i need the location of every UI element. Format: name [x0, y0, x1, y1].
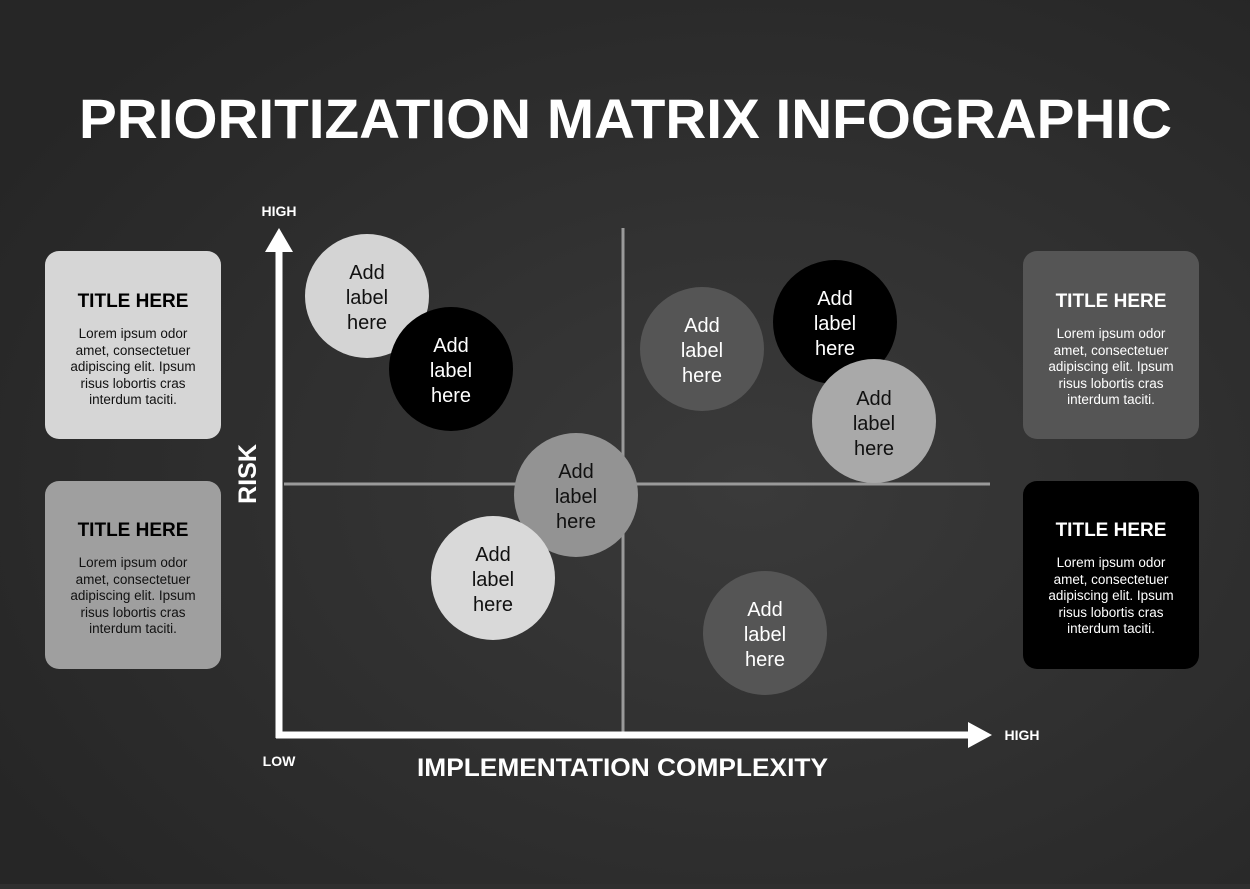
panel: left top: amet, consectetuer	[76, 343, 191, 358]
circle 7	[431, 516, 555, 640]
title: PRIORITIZATION MATRIX INFOGRAPHIC	[79, 87, 1172, 150]
circle 3: here	[682, 365, 722, 387]
circle 4: label	[814, 313, 856, 335]
panel: left bottom: adipiscing elit. Ipsum	[70, 588, 196, 603]
panel: right top: Lorem ipsum odor	[1057, 326, 1166, 341]
panel: left bottom: amet, consectetuer	[76, 572, 191, 587]
circle 7: Add	[475, 544, 511, 566]
circle 8: Add	[747, 599, 783, 621]
circle 7: label	[472, 569, 514, 591]
circle 2	[389, 307, 513, 431]
panel: right top: risus lobortis cras	[1058, 376, 1164, 391]
panel: right top	[1023, 251, 1199, 439]
circle 4: Add	[817, 288, 853, 310]
axis labels: HIGH	[262, 203, 296, 219]
circle 1: here	[347, 312, 387, 334]
panel: left bottom: interdum taciti.	[89, 621, 177, 636]
circle 8: here	[745, 649, 785, 671]
circle 5: Add	[856, 388, 892, 410]
panel: left top: risus lobortis cras	[80, 376, 186, 391]
circle 4	[773, 260, 897, 384]
panel: left bottom: risus lobortis cras	[80, 605, 186, 620]
axis labels: HIGH	[1004, 727, 1040, 743]
panel: right bottom	[1023, 481, 1199, 669]
axis: vertical risk	[265, 228, 293, 738]
circle 2: Add	[433, 335, 469, 357]
circle 1: label	[346, 287, 388, 309]
axis labels: RISK	[234, 444, 262, 504]
panel: left top: Lorem ipsum odor	[79, 326, 188, 341]
circle 2: here	[431, 385, 471, 407]
panel: right bottom: TITLE HERE	[1056, 520, 1166, 541]
panel: left top	[45, 251, 221, 439]
circle 5	[812, 359, 936, 483]
panel: right bottom: risus lobortis cras	[1058, 605, 1164, 620]
panel: left bottom: TITLE HERE	[78, 520, 188, 541]
panel: right bottom: interdum taciti.	[1067, 621, 1155, 636]
panel: left top: TITLE HERE	[78, 291, 188, 312]
panel: right top: interdum taciti.	[1067, 392, 1155, 407]
circle 2: label	[430, 360, 472, 382]
panel: left top: adipiscing elit. Ipsum	[70, 359, 196, 374]
circle 5: here	[854, 438, 894, 460]
circle 4: here	[815, 338, 855, 360]
circle 3: label	[681, 340, 723, 362]
axis labels	[234, 203, 1040, 782]
circle 8: label	[744, 624, 786, 646]
panel: right bottom: Lorem ipsum odor	[1057, 555, 1166, 570]
panel: left bottom	[45, 481, 221, 669]
panel: right top: amet, consectetuer	[1054, 343, 1169, 358]
panel: right top: adipiscing elit. Ipsum	[1048, 359, 1174, 374]
panel: right bottom: adipiscing elit. Ipsum	[1048, 588, 1174, 603]
circle 5: label	[853, 413, 895, 435]
circle 6: label	[555, 486, 597, 508]
axis labels: IMPLEMENTATION COMPLEXITY	[417, 754, 828, 782]
circle 1: Add	[349, 262, 385, 284]
panel: right bottom: amet, consectetuer	[1054, 572, 1169, 587]
axis labels: LOW	[263, 753, 296, 769]
circles	[305, 234, 936, 695]
circle 6: Add	[558, 461, 594, 483]
circle 6	[514, 433, 638, 557]
quadrant lines	[284, 228, 990, 735]
axis: horizontal complexity	[276, 722, 992, 748]
circle 7: here	[473, 594, 513, 616]
circle 8	[703, 571, 827, 695]
panel: left bottom: Lorem ipsum odor	[79, 555, 188, 570]
circle 3: Add	[684, 315, 720, 337]
circle 6: here	[556, 511, 596, 533]
panel: left top: interdum taciti.	[89, 392, 177, 407]
circle 3	[640, 287, 764, 411]
circle 1	[305, 234, 429, 358]
panel: right top: TITLE HERE	[1056, 291, 1166, 312]
